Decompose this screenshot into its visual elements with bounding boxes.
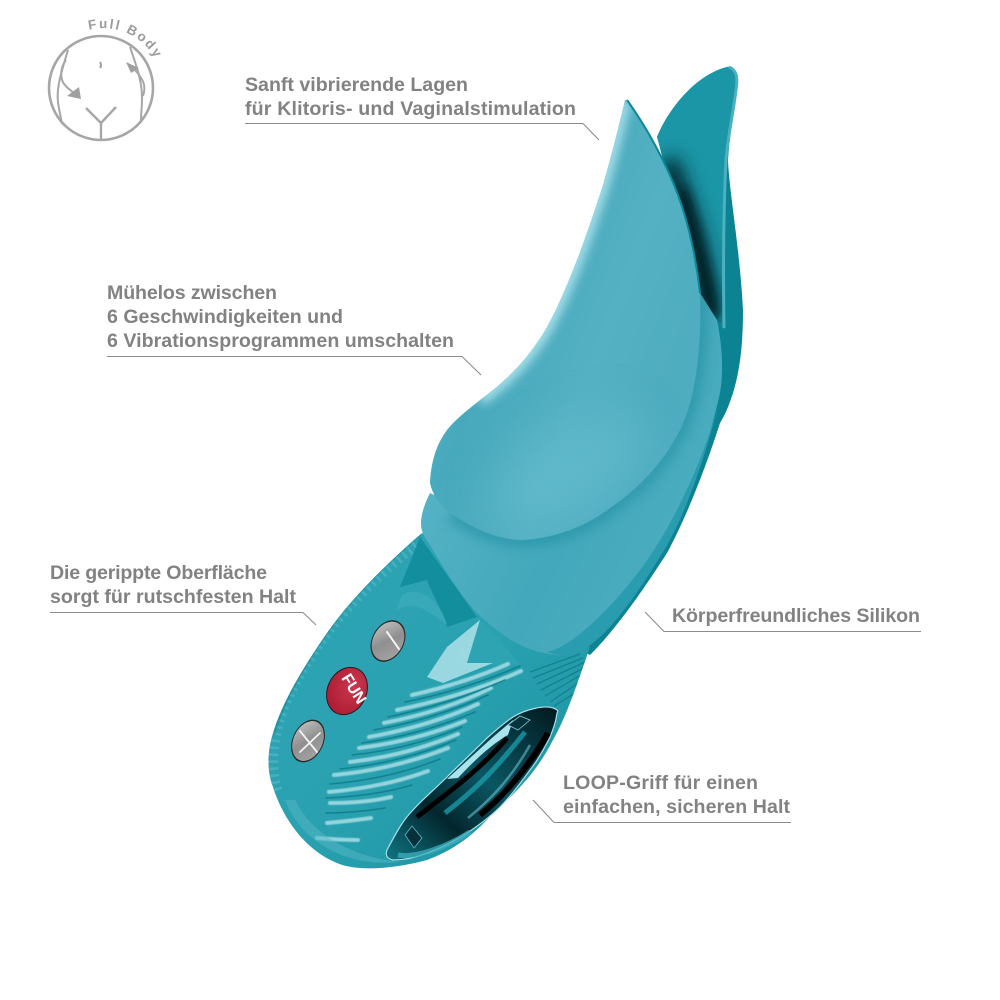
- callout: layers: [245, 74, 599, 140]
- callout: ribbed surface: Die gerippte Oberfläche: [50, 562, 267, 584]
- icon: full body badge: Full Body: [88, 18, 161, 56]
- callout: speeds: 6 Geschwindigkeiten und: [107, 306, 343, 328]
- callout: layers: Sanft vibrierende Lagen: [245, 74, 468, 96]
- callout: speeds: [107, 282, 481, 375]
- rear leaf: [588, 66, 743, 655]
- callout: loop grip: LOOP-Griff für einen: [563, 772, 758, 794]
- glossy reflection: [400, 537, 477, 627]
- top leaf: [430, 100, 700, 551]
- buttons: [284, 614, 412, 768]
- callout: silicone: Körperfreundliches Silikon: [672, 605, 920, 627]
- button: FUN: [318, 660, 376, 722]
- callout: layers: für Klitoris- und Vaginalstimulation: [245, 98, 576, 120]
- callout: speeds: 6 Vibrationsprogrammen umschalten: [107, 330, 454, 352]
- callout: ribbed surface: [50, 562, 316, 625]
- fan ribs: [530, 654, 586, 706]
- lower leaf layer: [421, 293, 722, 655]
- product: layered vibrator: [268, 67, 743, 868]
- rib shadows: [326, 666, 520, 813]
- callout: speeds: Mühelos zwischen: [107, 282, 277, 304]
- icon: full body badge: [48, 18, 161, 142]
- button: plus: [284, 714, 332, 768]
- callout: loop grip: einfachen, sicheren Halt: [563, 796, 790, 818]
- button: FUN: FUN: [338, 671, 369, 707]
- ribbed left edge: [273, 545, 416, 792]
- loop grip: [386, 707, 558, 860]
- rib highlights: [317, 664, 521, 840]
- button: minus: [364, 614, 412, 668]
- callout: loop grip: [533, 772, 791, 822]
- callout: ribbed surface: sorgt für rutschfesten Halt: [50, 586, 296, 608]
- handle: [268, 533, 590, 868]
